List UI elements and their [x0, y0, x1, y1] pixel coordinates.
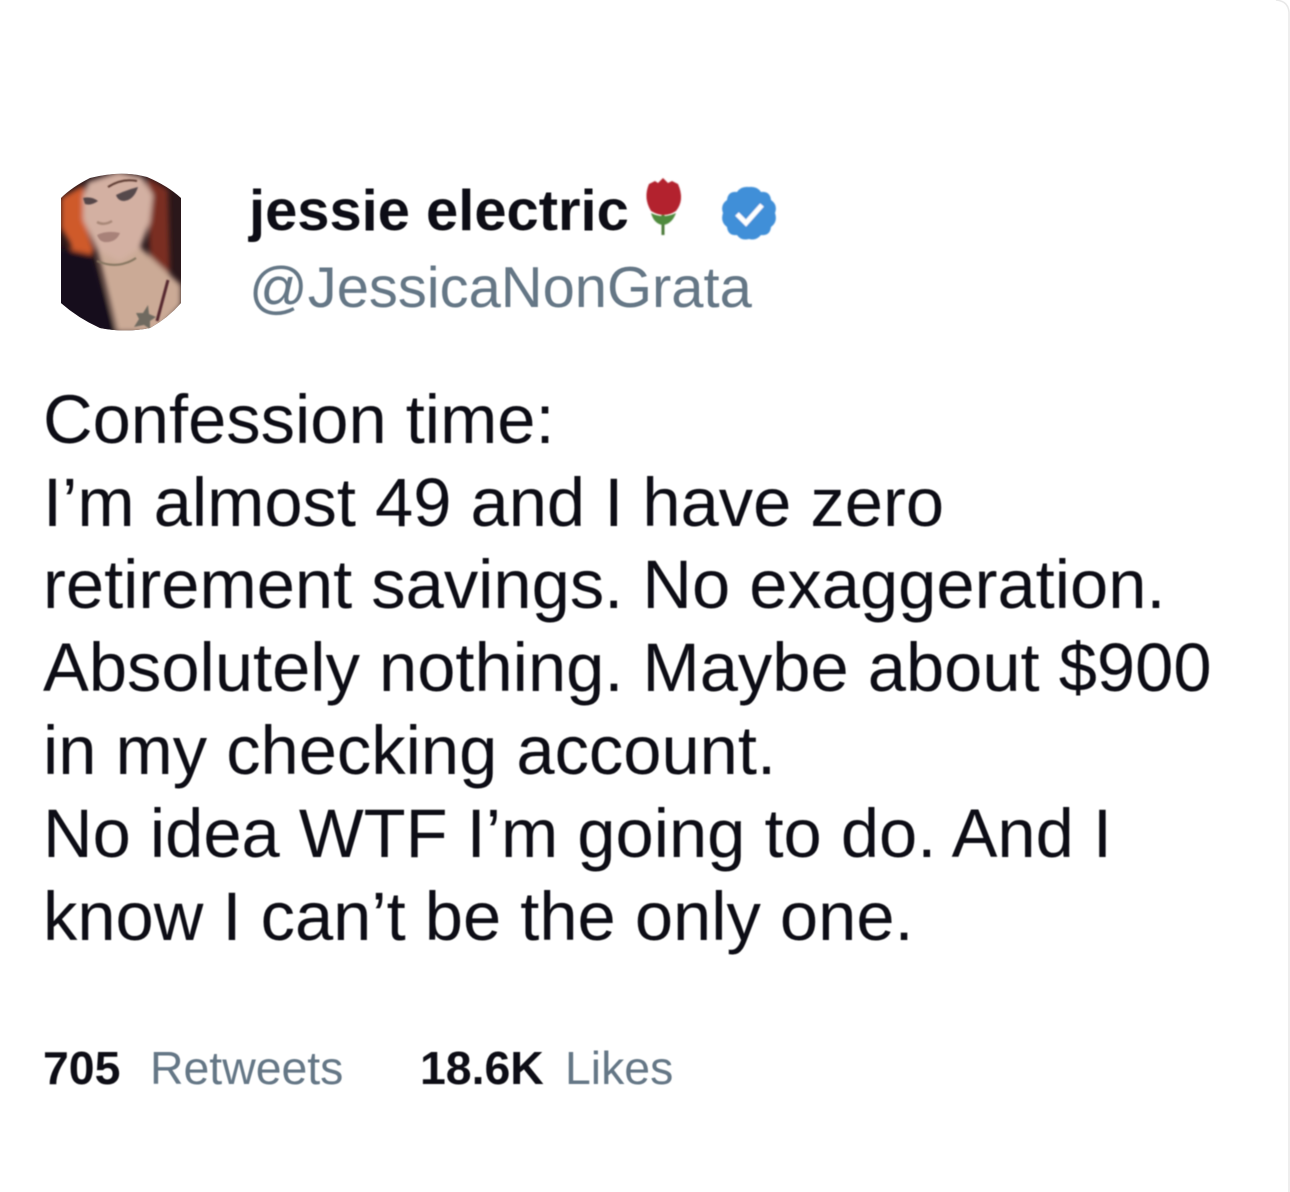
dress	[61, 246, 118, 330]
eye left	[83, 197, 98, 205]
chest skin	[97, 247, 181, 332]
likes count: 18.6K	[420, 1042, 544, 1094]
tweet body: retirement savings. No exaggeration.	[43, 546, 1165, 623]
tweet body: I’m almost 49 and I have zero	[43, 464, 944, 541]
likes count: Likes	[565, 1042, 673, 1094]
retweets count: 705	[43, 1042, 120, 1094]
avatar	[55, 170, 181, 335]
tweet body: No idea WTF I’m going to do. And I	[43, 795, 1112, 872]
lips	[97, 232, 120, 242]
nose	[97, 221, 112, 224]
brow	[108, 180, 137, 187]
tweet body: in my checking account.	[43, 712, 776, 789]
hair left	[61, 182, 98, 260]
tweet body: Absolutely nothing. Maybe about $900	[43, 629, 1212, 706]
face	[83, 172, 153, 262]
icon: rose emoji	[646, 178, 681, 235]
tweet body: know I can’t be the only one.	[43, 878, 914, 955]
choker	[97, 258, 136, 265]
tweet text group	[43, 179, 1212, 1094]
tweet body	[43, 381, 1212, 955]
page edge	[1276, 0, 1289, 1192]
icon: verified badge	[722, 187, 776, 240]
likes count	[420, 1042, 673, 1094]
eye right	[116, 187, 138, 201]
handle: @JessicaNonGrata	[249, 256, 753, 320]
retweets count	[43, 1042, 343, 1094]
star tattoo	[134, 305, 156, 329]
retweets count: Retweets	[150, 1042, 343, 1094]
tweet body: Confession time:	[43, 381, 555, 458]
display name: jessie electric	[248, 179, 629, 243]
hair right	[147, 177, 170, 278]
strap	[157, 280, 168, 321]
